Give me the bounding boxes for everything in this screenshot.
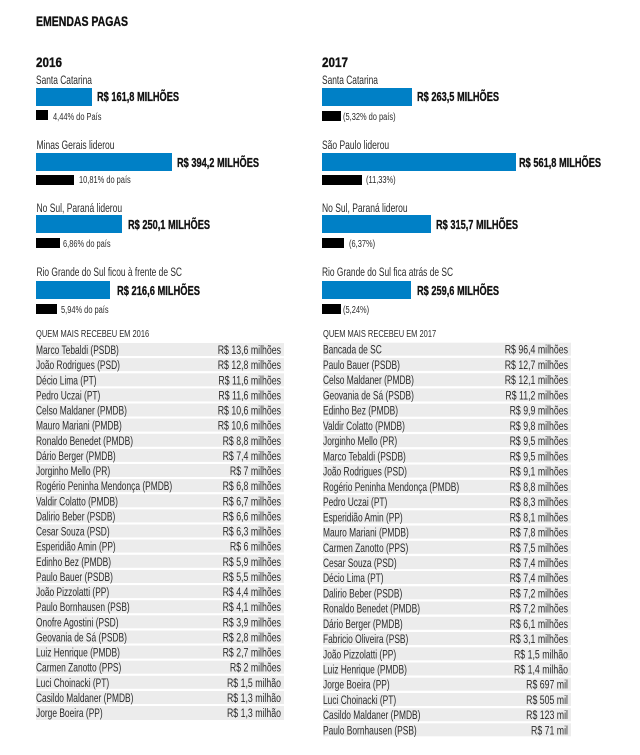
- row: [36, 509, 284, 524]
- row: Jorge Boeira (PP): [323, 679, 390, 692]
- row: [36, 524, 284, 539]
- bar group: São Paulo 2017: [322, 140, 601, 185]
- bar group: Paraná 2017: No Sul, Paraná liderou: [322, 203, 408, 215]
- row: [323, 556, 571, 571]
- row: R$ 7,4 milhões: [510, 557, 568, 571]
- bar group: São Paulo 2017: R$ 561,8 MILHÕES: [519, 155, 601, 170]
- bar group: Rio Grande do Sul 2016: 5,94% do país: [61, 304, 109, 315]
- row: Paulo Bauer (PSDB): [323, 360, 400, 372]
- row: Carmen Zanotto (PPS): [323, 543, 408, 555]
- row: [36, 661, 284, 675]
- row: [36, 646, 284, 660]
- row: R$ 1,3 milhão: [227, 707, 281, 720]
- row: [323, 373, 571, 388]
- row: R$ 7,5 milhões: [510, 542, 568, 555]
- row: Casildo Maldaner (PMDB): [323, 710, 420, 723]
- row: [36, 691, 284, 705]
- row: João Rodrigues (PSD): [36, 360, 120, 373]
- row: Geovania de Sá (PSDB): [323, 390, 414, 403]
- row: R$ 3,1 milhões: [510, 633, 568, 646]
- row: R$ 1,5 milhão: [514, 648, 568, 662]
- row: Edinho Bez (PMDB): [323, 405, 398, 418]
- row: Jorge Boeira (PP): [36, 708, 103, 720]
- row: R$ 6,6 milhões: [223, 510, 281, 524]
- row: Dalirio Beber (PSDB): [323, 588, 402, 601]
- row: Luci Choinacki (PT): [323, 695, 396, 707]
- row: Ronaldo Benedet (PMDB): [36, 436, 133, 448]
- row: R$ 10,6 milhões: [218, 419, 281, 433]
- row: R$ 8,3 milhões: [510, 496, 568, 510]
- row: João Pizzolatti (PP): [323, 649, 396, 662]
- row: R$ 123 mil: [526, 709, 568, 723]
- row: [323, 541, 571, 555]
- bar group: Rio Grande do Sul 2017: R$ 259,6 MILHÕES: [417, 283, 499, 298]
- row: [323, 465, 571, 479]
- bar group: Paraná 2017: R$ 315,7 MILHÕES: [436, 217, 518, 232]
- row: [36, 585, 284, 600]
- row: [323, 647, 571, 662]
- row: [323, 449, 571, 464]
- row: [323, 343, 571, 357]
- table heading 2016: QUEM MAIS RECEBEU EM 2016: [36, 328, 149, 339]
- row: Jorginho Mello (PR): [323, 436, 397, 449]
- row: [36, 358, 284, 373]
- row: R$ 1,5 milhão: [227, 677, 281, 690]
- row: R$ 1,4 milhão: [514, 663, 568, 677]
- row: R$ 6 milhões: [230, 540, 281, 554]
- row: R$ 11,6 milhões: [218, 389, 281, 403]
- row: [36, 373, 284, 388]
- row: R$ 8,8 milhões: [510, 481, 568, 494]
- row: Onofre Agostini (PSD): [36, 617, 119, 630]
- row: R$ 8,8 milhões: [223, 435, 281, 448]
- row: [36, 404, 284, 418]
- row: Cesar Souza (PSD): [323, 558, 397, 571]
- row: [323, 708, 571, 723]
- bar group: Santa Catarina 2016: 4,44% do País: [53, 111, 102, 122]
- row: Luiz Henrique (PMDB): [323, 664, 407, 677]
- row: Casildo Maldaner (PMDB): [36, 693, 133, 705]
- row: Luci Choinacki (PT): [36, 678, 109, 690]
- row: Edinho Bez (PMDB): [36, 557, 111, 569]
- row: [36, 615, 284, 630]
- row: [323, 358, 571, 372]
- row: [36, 343, 284, 357]
- bar group: Paraná 2017: [322, 203, 518, 249]
- panel: 2017 bars: [322, 54, 601, 315]
- row: R$ 7,2 milhões: [510, 602, 568, 616]
- row: R$ 9,5 milhões: [510, 435, 568, 449]
- row: Luiz Henrique (PMDB): [36, 647, 120, 660]
- row: Marco Tebaldi (PSDB): [323, 451, 406, 464]
- row: Pedro Uczai (PT): [36, 390, 100, 403]
- row: Pedro Uczai (PT): [323, 497, 387, 510]
- row: Cesar Souza (PSD): [36, 526, 110, 539]
- row: João Pizzolatti (PP): [36, 587, 109, 600]
- row: [323, 693, 571, 707]
- row: João Rodrigues (PSD): [323, 466, 407, 479]
- row: R$ 9,5 milhões: [510, 450, 568, 464]
- row: R$ 13,6 milhões: [218, 344, 281, 357]
- row: Dalirio Beber (PSDB): [36, 511, 115, 524]
- row: R$ 7,2 milhões: [510, 587, 568, 601]
- row: [323, 404, 571, 418]
- row: Geovania de Sá (PSDB): [36, 632, 127, 645]
- row: Carmen Zanotto (PPS): [36, 662, 121, 675]
- row: [323, 388, 571, 403]
- row: [323, 723, 571, 738]
- row: [323, 434, 571, 449]
- bar group: Santa Catarina 2017: Santa Catarina: [322, 75, 378, 87]
- bar group: Santa Catarina 2016: R$ 161,8 MILHÕES: [97, 89, 179, 104]
- row: R$ 6,1 milhões: [510, 618, 568, 631]
- bar group: Rio Grande do Sul 2017: [322, 267, 499, 315]
- row: Esperidião Amin (PP): [36, 541, 116, 554]
- row: R$ 1,3 milhão: [227, 692, 281, 705]
- row: R$ 7,8 milhões: [510, 526, 568, 540]
- row: Paulo Bauer (PSDB): [36, 572, 113, 584]
- row: R$ 71 mil: [531, 724, 568, 738]
- bar group: São Paulo 2017: São Paulo liderou: [322, 140, 389, 152]
- row: Marco Tebaldi (PSDB): [36, 345, 119, 357]
- row: Décio Lima (PT): [36, 375, 97, 388]
- bar group: Santa Catarina 2017: [322, 75, 499, 122]
- row: [36, 449, 284, 463]
- row: R$ 2 milhões: [230, 661, 281, 675]
- row: R$ 96,4 milhões: [505, 343, 568, 357]
- panel: 2016 bars: [36, 54, 259, 315]
- row: R$ 9,9 milhões: [510, 404, 568, 418]
- bar group: Paraná 2016: R$ 250,1 MILHÕES: [128, 217, 210, 232]
- row: Celso Maldaner (PMDB): [323, 375, 414, 388]
- row: Décio Lima (PT): [323, 573, 384, 585]
- row: [36, 494, 284, 509]
- row: Valdir Colatto (PMDB): [323, 421, 405, 433]
- bar group: Santa Catarina 2017: (5,32% do país): [343, 111, 396, 122]
- row: [323, 678, 571, 692]
- row: R$ 7,4 milhões: [223, 450, 281, 463]
- bar group: Minas Gerais 2016: R$ 394,2 MILHÕES: [177, 155, 259, 170]
- bar group: Paraná 2017: (6,37%): [349, 238, 375, 249]
- row: Jorginho Mello (PR): [36, 466, 110, 478]
- row: Rogério Peninha Mendonça (PMDB): [323, 482, 459, 494]
- row: Celso Maldaner (PMDB): [36, 405, 127, 418]
- row: [323, 419, 571, 433]
- row: Valdir Colatto (PMDB): [36, 496, 118, 509]
- row: [323, 571, 571, 585]
- row: Dário Berger (PMDB): [36, 451, 116, 463]
- heading: 2017: 2017: [322, 54, 348, 70]
- bar group: Paraná 2016: [36, 203, 210, 249]
- bar group: Paraná 2016: 6,86% do país: [63, 238, 111, 249]
- bar group: Minas Gerais 2016: 10,81% do país: [79, 174, 131, 185]
- row: R$ 9,1 milhões: [510, 465, 568, 479]
- table: quem mais recebeu em 2016: [36, 328, 284, 720]
- row: [323, 480, 571, 494]
- row: [323, 602, 571, 616]
- bar group: Santa Catarina 2017: R$ 263,5 MILHÕES: [417, 89, 499, 104]
- title: EMENDAS PAGAS: [36, 13, 128, 29]
- bar group: Minas Gerais 2016: Minas Gerais liderou: [36, 140, 115, 152]
- row: R$ 2,7 milhões: [223, 646, 281, 660]
- row: [36, 600, 284, 615]
- row: [36, 388, 284, 403]
- bar group: Rio Grande do Sul 2017: (5,24%): [343, 304, 369, 315]
- row: R$ 8,1 milhões: [510, 511, 568, 525]
- row: R$ 2,8 milhões: [223, 631, 281, 645]
- row: R$ 6,8 milhões: [223, 480, 281, 494]
- row: R$ 9,8 milhões: [510, 420, 568, 433]
- row: [323, 526, 571, 540]
- row: Fabricio Oliveira (PSB): [323, 634, 408, 646]
- row: Bancada de SC: [323, 344, 382, 357]
- row: Esperidião Amin (PP): [323, 512, 403, 525]
- row: R$ 6,7 milhões: [223, 495, 281, 509]
- row: [323, 632, 571, 646]
- row: Ronaldo Benedet (PMDB): [323, 603, 420, 616]
- row: [36, 630, 284, 645]
- row: R$ 3,9 milhões: [223, 616, 281, 630]
- row: R$ 12,8 milhões: [218, 359, 281, 373]
- bar group: Rio Grande do Sul 2016: R$ 216,6 MILHÕES: [117, 283, 200, 298]
- bar group: Rio Grande do Sul 2016: Rio Grande do Sul ficou à frente de SC: [36, 267, 182, 279]
- row: [323, 662, 571, 677]
- row: [36, 555, 284, 569]
- row: [323, 495, 571, 510]
- row: [36, 464, 284, 478]
- row: [36, 419, 284, 433]
- table heading 2017: QUEM MAIS RECEBEU EM 2017: [323, 328, 436, 339]
- row: R$ 5,5 milhões: [223, 571, 281, 584]
- row: R$ 4,1 milhões: [223, 601, 281, 615]
- row: R$ 697 mil: [526, 678, 568, 692]
- row: [36, 676, 284, 690]
- row: R$ 12,1 milhões: [505, 374, 568, 388]
- table: quem mais recebeu em 2017: [323, 328, 571, 738]
- bar group: Santa Catarina 2016: Santa Catarina: [36, 75, 92, 87]
- row: R$ 505 mil: [526, 694, 568, 707]
- bar group: São Paulo 2017: (11,33%): [366, 174, 396, 185]
- row: R$ 7 milhões: [230, 465, 281, 478]
- bar group: Paraná 2016: No Sul, Paraná liderou: [36, 203, 122, 215]
- row: [36, 434, 284, 448]
- row: Mauro Mariani (PMDB): [36, 420, 122, 433]
- row: [323, 586, 571, 601]
- row: [36, 570, 284, 584]
- bar group: Rio Grande do Sul 2017: Rio Grande do Sul fica atrás de SC: [322, 267, 453, 279]
- heading: 2016: 2016: [36, 54, 62, 70]
- row: R$ 11,6 milhões: [218, 374, 281, 388]
- row: R$ 4,4 milhões: [223, 586, 281, 600]
- bar group: Santa Catarina 2016: [36, 75, 179, 122]
- row: [323, 617, 571, 631]
- row: R$ 12,7 milhões: [505, 359, 568, 372]
- row: R$ 11,2 milhões: [505, 389, 568, 403]
- row: R$ 10,6 milhões: [218, 404, 281, 418]
- row: Rogério Peninha Mendonça (PMDB): [36, 481, 172, 494]
- row: Dário Berger (PMDB): [323, 619, 403, 631]
- row: Paulo Bornhausen (PSB): [323, 725, 417, 738]
- row: [36, 540, 284, 554]
- row: R$ 7,4 milhões: [510, 572, 568, 585]
- row: [36, 706, 284, 720]
- row: [323, 510, 571, 525]
- bar group: Rio Grande do Sul 2016: [36, 267, 200, 315]
- row: Mauro Mariani (PMDB): [323, 527, 409, 540]
- row: R$ 6,3 milhões: [223, 525, 281, 539]
- row: [36, 479, 284, 494]
- row: R$ 5,9 milhões: [223, 556, 281, 569]
- bar group: Minas Gerais 2016: [36, 140, 259, 185]
- row: Paulo Bornhausen (PSB): [36, 602, 130, 615]
